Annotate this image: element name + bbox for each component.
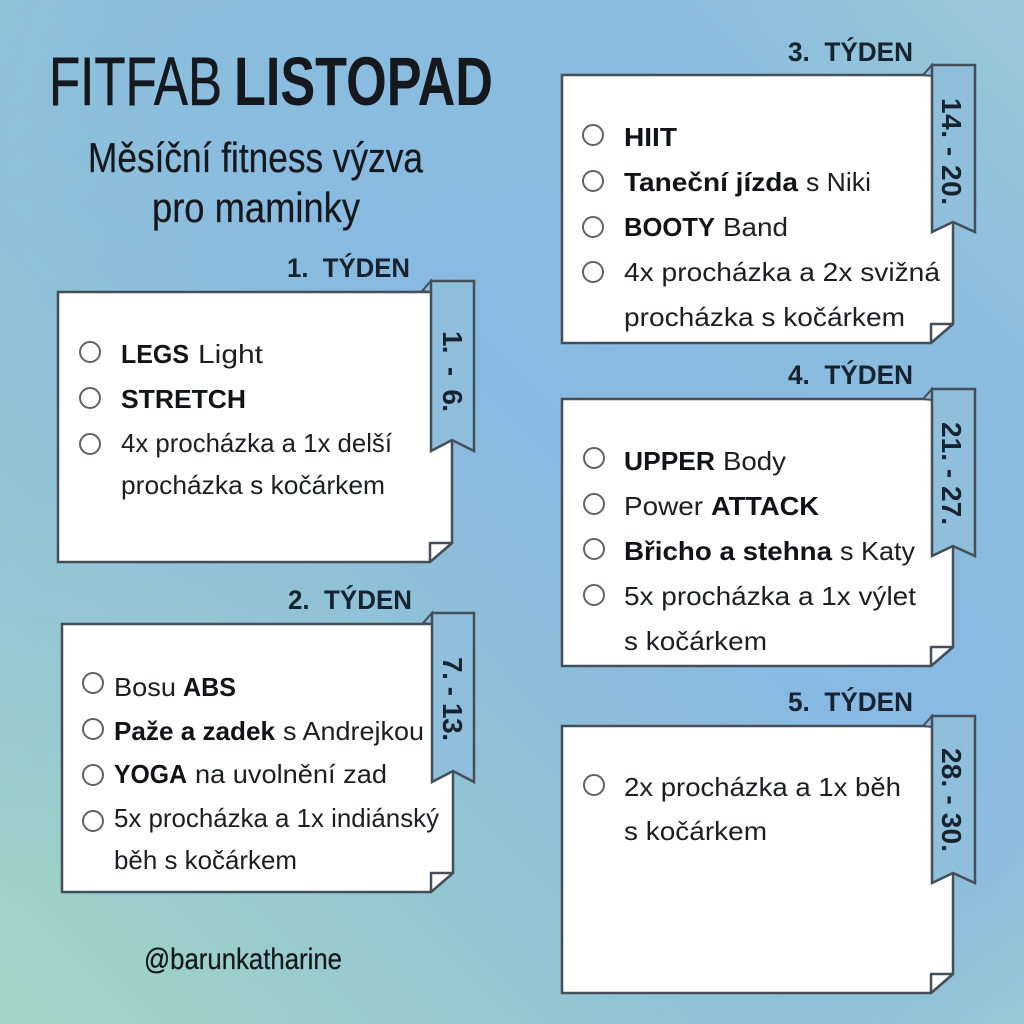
checklist: week 4 [584,446,917,656]
checklist: week 2: na uvolnění zad [195,759,387,789]
heading: week 4: 4. TÝDEN [788,359,913,390]
checklist: week 4: Body [723,446,786,476]
checklist: week 1: LEGS [121,339,189,369]
panel: week 4 [562,359,975,666]
checklist: week 5: s kočárkem [624,816,767,846]
ribbon: dates 7. - 13.: 7. - 13. [437,657,468,741]
heading: week 1: 1. TÝDEN [287,252,410,283]
checklist: week 2 [83,672,439,875]
checklist: week 3: 4x procházka a 2x svižná [624,257,941,287]
checklist: week 1: STRETCH [121,384,246,414]
checklist: week 4: 5x procházka a 1x výlet [624,581,917,611]
subtitle: pro maminky [152,184,360,231]
card: week 2 [62,624,453,892]
checklist: week 4: ATTACK [711,491,819,521]
checklist: week 4: Power [624,491,703,521]
checklist: week 1: procházka s kočárkem [121,470,385,500]
checklist: week 3: Taneční jízda [624,167,799,197]
checklist: week 4: UPPER [624,446,715,476]
ribbon: dates 21. - 27.: 21. - 27. [936,422,967,525]
title: LISTOPAD [234,43,493,120]
ribbon: dates 14. - 20. [923,65,975,232]
title [49,43,493,120]
checklist: week 1: Light [198,339,264,369]
panel: week 2 [62,584,474,892]
checklist: week 2: 5x procházka a 1x indiánský [114,803,439,833]
checklist: week 2: ABS [183,672,236,702]
checklist: week 5 [584,772,901,846]
checklist: week 2: YOGA [114,759,187,789]
checklist: week 2: Paže a zadek [114,716,276,746]
checklist: week 3 [583,122,941,332]
panel: week 5 [562,686,975,993]
subtitle: Měsíční fitness výzva [88,134,424,181]
panel: week 1 [58,252,474,562]
heading: week 3: 3. TÝDEN [788,36,913,67]
checklist: week 2: běh s kočárkem [114,845,297,875]
checklist: week 3: procházka s kočárkem [624,302,905,332]
card: week 4 [562,399,953,666]
title: FITFAB [49,43,222,120]
card: week 3 [562,75,953,343]
ribbon: dates 1. - 6. [422,281,474,451]
heading: week 2: 2. TÝDEN [288,584,412,615]
ribbon: dates 1. - 6.: 1. - 6. [437,331,468,412]
checklist: week 4: Břicho a stehna [624,536,833,566]
ribbon: dates 14. - 20.: 14. - 20. [936,98,967,205]
checklist: week 3: BOOTY [624,212,715,242]
checklist: week 2: s Andrejkou [283,716,424,746]
ribbon: dates 7. - 13. [423,613,474,782]
subtitle [88,134,424,231]
checklist: week 3: s Niki [806,167,871,197]
ribbon: dates 28. - 30.: 28. - 30. [936,748,967,852]
checklist: week 4: s kočárkem [624,626,767,656]
checklist: week 5: 2x procházka a 1x běh [624,772,901,802]
card: week 1 [58,292,452,562]
author handle: @barunkatharine [144,943,342,976]
checklist: week 3: Band [723,212,788,242]
checklist: week 4: s Katy [840,536,915,566]
checklist: week 3: HIIT [624,122,677,152]
checklist: week 1: 4x procházka a 1x delší [121,428,393,458]
ribbon: dates 21. - 27. [923,389,975,556]
heading: week 5: 5. TÝDEN [788,686,913,717]
panel: week 3 [562,36,975,343]
card: week 5 [562,726,953,993]
ribbon: dates 28. - 30. [923,716,975,883]
checklist: week 2: Bosu [114,672,176,702]
checklist: week 1 [80,339,393,500]
